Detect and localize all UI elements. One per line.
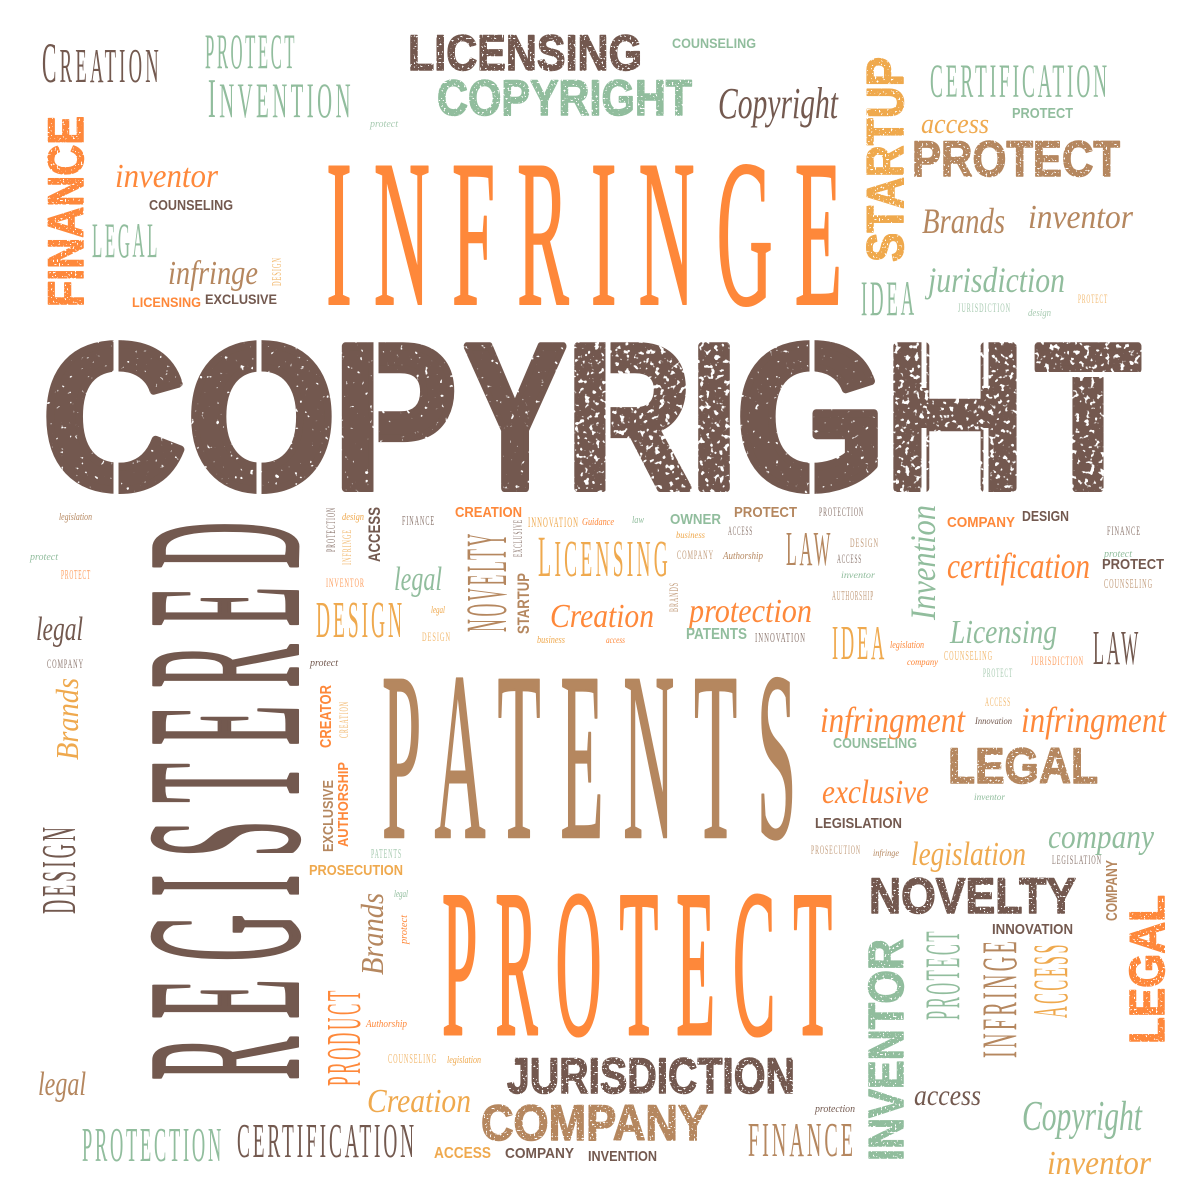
word cloud: PRODUCT <box>316 988 371 1086</box>
word: Brands: Brands <box>49 678 85 760</box>
word: law: law <box>632 515 644 526</box>
word: Guidance: Guidance <box>582 517 614 528</box>
word: protect: protect <box>29 551 59 563</box>
word cloud: DESIGN <box>422 629 451 644</box>
word: jurisdiction: jurisdiction <box>925 260 1065 300</box>
word: PATENTS: PATENTS <box>686 626 747 643</box>
word cloud: LEGISLATION <box>1052 852 1102 867</box>
word: legislation: legislation <box>890 640 924 651</box>
word: protect: protect <box>399 915 410 945</box>
word cloud: PROTECT <box>205 23 297 79</box>
word cloud: CERTIFICATION <box>237 1113 417 1168</box>
word: Copyright: Copyright <box>1022 1094 1143 1140</box>
word: company: company <box>907 657 938 667</box>
word: infringe: infringe <box>873 848 899 858</box>
word cloud: FINANCE <box>748 1112 856 1167</box>
word cloud: PROTECT <box>914 929 970 1020</box>
word: legislation: legislation <box>447 1055 481 1066</box>
word: Innovation: Innovation <box>974 716 1012 726</box>
word cloud: NOVELTY <box>454 531 519 632</box>
word: Licensing: Licensing <box>949 614 1057 651</box>
word cloud: ACCESS <box>837 551 862 566</box>
word cloud: PROTECT <box>1078 291 1108 306</box>
word: COMPANY: COMPANY <box>481 1095 708 1151</box>
word: PROTECT: PROTECT <box>912 131 1120 187</box>
word: Brands: Brands <box>922 201 1005 241</box>
word cloud: COMPANY <box>677 547 714 562</box>
word cloud: INFRINGE <box>971 938 1027 1058</box>
word cloud: PROTECT <box>61 568 91 583</box>
word cloud: ACCESS <box>1022 942 1078 1018</box>
word: infringment: infringment <box>1021 700 1167 740</box>
word cloud: COUNSELING <box>388 1052 437 1067</box>
word cloud: PROTECT <box>983 665 1013 680</box>
word: COPYRIGHT: COPYRIGHT <box>437 70 692 126</box>
word: inventor: inventor <box>1047 1145 1152 1182</box>
word: infringe: infringe <box>168 255 258 292</box>
word cloud: PROTECTION <box>819 504 864 519</box>
main word: COPYRIGHT: H <box>884 302 1026 532</box>
word: Brands: Brands <box>354 893 390 975</box>
word: LICENSING: LICENSING <box>132 294 201 310</box>
word: design: design <box>342 512 364 523</box>
word: STARTUP: STARTUP <box>857 57 915 262</box>
word: Creation: Creation <box>367 1083 471 1120</box>
word: legal: legal <box>431 605 445 616</box>
word cloud: INNOVATION <box>528 515 579 531</box>
word: INVENTION: INVENTION <box>588 1148 657 1165</box>
word: COUNSELING: COUNSELING <box>672 35 756 51</box>
word: design: design <box>1028 308 1051 319</box>
word: LICENSING: LICENSING <box>408 25 642 81</box>
word cloud: FINANCE <box>402 514 435 529</box>
word: protect: protect <box>369 119 398 130</box>
word: PROSECUTION: PROSECUTION <box>309 862 403 879</box>
main word: COPYRIGHT: I <box>690 302 738 532</box>
word: PROTECT: PROTECT <box>1102 556 1164 573</box>
word: exclusive: exclusive <box>822 774 929 811</box>
word: access: access <box>921 109 989 140</box>
word: company: company <box>1048 819 1155 856</box>
word: protection: protection <box>814 1104 855 1115</box>
main word: COPYRIGHT: Y <box>464 302 566 532</box>
word cloud: INVENTION <box>208 68 354 130</box>
word: AUTHORSHIP: AUTHORSHIP <box>335 762 352 847</box>
word: business: business <box>537 635 565 646</box>
word cloud: ACCESS <box>985 694 1011 709</box>
word: infringment: infringment <box>820 700 966 740</box>
main word: COPYRIGHT: T <box>1036 302 1140 532</box>
word: INNOVATION: INNOVATION <box>992 921 1073 938</box>
word cloud: AUTHORSHIP <box>832 589 874 604</box>
word: INVENTOR: INVENTOR <box>860 939 914 1161</box>
word: EXCLUSIVE: EXCLUSIVE <box>205 291 277 307</box>
word cloud: JURISDICTION <box>958 300 1011 315</box>
word cloud: INFRINGE <box>339 529 354 565</box>
word: legislation: legislation <box>911 836 1026 873</box>
word cloud: LEGAL <box>92 212 160 268</box>
word: access: access <box>606 635 625 645</box>
word cloud: DESIGN <box>316 592 405 649</box>
word cloud: CREATION <box>336 701 351 738</box>
word cloud: COUNSELING <box>944 649 993 664</box>
word: PROTECT: PROTECT <box>1012 105 1073 122</box>
word: Creation: Creation <box>550 598 654 635</box>
word: protect: protect <box>1103 549 1132 560</box>
word: LEGAL: LEGAL <box>948 738 1098 794</box>
word: OWNER: OWNER <box>670 511 721 528</box>
word: business: business <box>676 530 705 540</box>
word: protection: protection <box>687 593 812 630</box>
word: ACCESS: ACCESS <box>365 507 384 562</box>
word cloud: DESIGN <box>31 824 86 914</box>
word: PROTECT: PROTECT <box>734 504 797 521</box>
word: legal: legal <box>36 611 83 648</box>
word cloud: CREATION <box>42 32 162 95</box>
word: STARTUP: STARTUP <box>514 573 533 634</box>
word cloud: PATENTS <box>371 847 402 862</box>
word: legislation: legislation <box>59 512 92 523</box>
word: COMPANY: COMPANY <box>505 1145 574 1162</box>
word: JURISDICTION: JURISDICTION <box>507 1048 795 1104</box>
word cloud: INNOVATION <box>755 631 806 646</box>
word: FINANCE: FINANCE <box>38 116 94 307</box>
word: COUNSELING: COUNSELING <box>149 198 233 214</box>
word cloud: IDEA <box>832 615 887 670</box>
word: legal: legal <box>394 561 442 598</box>
word: Copyright: Copyright <box>718 79 839 128</box>
word: ACCESS: ACCESS <box>434 1145 491 1162</box>
word: COUNSELING: COUNSELING <box>833 735 917 752</box>
word: Invention: Invention <box>903 505 943 621</box>
word: certification: certification <box>947 546 1090 586</box>
word: CREATOR: CREATOR <box>318 685 335 748</box>
word: inventor: inventor <box>1028 199 1134 236</box>
word cloud: LAW <box>786 521 833 576</box>
word: Authorship: Authorship <box>722 550 763 562</box>
word: EXCLUSIVE: EXCLUSIVE <box>320 780 337 852</box>
word: NOVELTY: NOVELTY <box>869 868 1076 924</box>
word cloud: COMPANY <box>47 656 84 671</box>
word cloud: INVENTOR <box>326 575 365 590</box>
word cloud: DESIGN <box>850 535 879 550</box>
word cloud: BRANDS <box>666 582 681 612</box>
word cloud: PROSECUTION <box>811 842 861 857</box>
word cloud: LICENSING <box>538 524 671 589</box>
word cloud: EXCLUSIVE <box>510 519 525 557</box>
main word: COPYRIGHT: O <box>187 302 336 532</box>
word: COMPANY: COMPANY <box>947 514 1015 531</box>
word: LEGAL: LEGAL <box>1121 895 1175 1044</box>
word: legal: legal <box>394 889 408 900</box>
word: protect: protect <box>309 657 339 669</box>
main word: COPYRIGHT: P <box>333 302 457 532</box>
word: CREATION: CREATION <box>455 504 522 521</box>
word: inventor: inventor <box>115 158 219 195</box>
word cloud: PROTECTION <box>82 1117 224 1172</box>
main word: COPYRIGHT: G <box>736 302 886 532</box>
main word: COPYRIGHT: R <box>566 302 692 532</box>
word cloud: ACCESS <box>728 523 753 538</box>
word: DESIGN: DESIGN <box>1022 508 1069 525</box>
main word: COPYRIGHT: C <box>42 302 186 532</box>
word: LEGISLATION: LEGISLATION <box>815 815 902 832</box>
main word: COPYRIGHT <box>42 302 1150 532</box>
word: Authorship: Authorship <box>365 1019 407 1030</box>
word cloud: IDEA <box>861 270 917 326</box>
word cloud: DESIGN <box>270 257 285 286</box>
word cloud: JURISDICTION <box>1031 653 1084 668</box>
word cloud: FINANCE <box>1107 523 1141 538</box>
word: inventor: inventor <box>841 570 876 580</box>
word: COMPANY: COMPANY <box>1104 860 1121 921</box>
word: inventor: inventor <box>974 792 1006 802</box>
word: access: access <box>914 1079 981 1112</box>
word cloud: PROTECTION <box>323 507 338 552</box>
word: legal: legal <box>38 1066 86 1103</box>
